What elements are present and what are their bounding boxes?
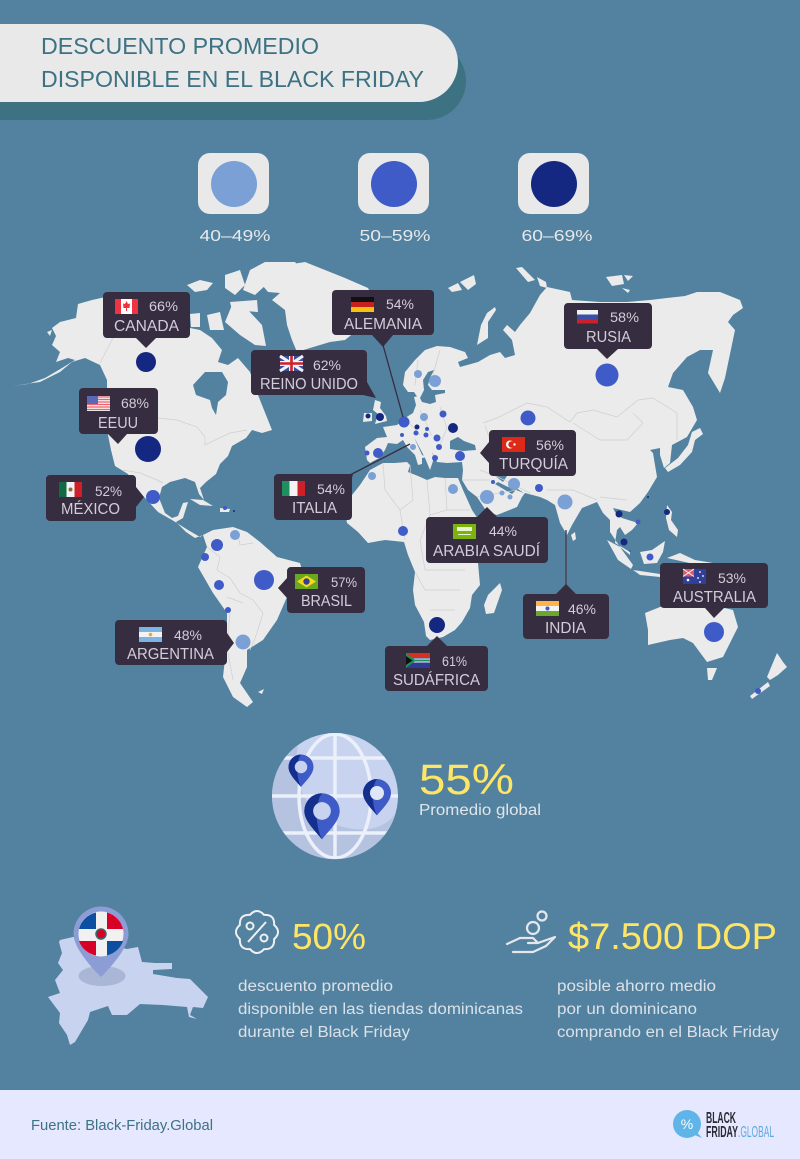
callout: India with leader line: INDIA — [545, 620, 587, 637]
callout: EEUU: 68% — [121, 395, 149, 411]
footer band — [0, 1090, 800, 1159]
icon: hand with coins — [507, 912, 555, 952]
callout: Canadá — [103, 292, 190, 348]
stat: Dominican average discount: 50% — [292, 916, 366, 957]
callout: Alemania with leader line: 54% — [386, 296, 414, 312]
callout: Sudáfrica: SUDÁFRICA — [393, 672, 481, 689]
callout: EEUU — [79, 388, 158, 444]
stat: Dominican average discount: descuento promedio — [238, 978, 393, 995]
logo: Black Friday Global: FRIDAY — [706, 1124, 738, 1141]
stat: Dominican average discount: durante el Black Friday — [238, 1024, 410, 1041]
callout: Brasil — [278, 567, 365, 613]
callout: Australia: AUSTRALIA — [673, 589, 757, 606]
callout: Australia: 53% — [718, 570, 746, 586]
map country borders — [100, 338, 677, 680]
icon: percent badge — [236, 911, 278, 953]
callout: Brasil: BRASIL — [301, 593, 352, 610]
callout: México — [46, 475, 144, 521]
map data bubbles — [135, 352, 761, 694]
stat: Dominican average discount: disponible en las tiendas dominicanas — [238, 1001, 523, 1018]
logo: Black Friday Global: BLACK — [706, 1110, 736, 1127]
legend: 40–49% — [200, 228, 270, 245]
callout: Reino Unido: 62% — [313, 357, 341, 373]
callout: Argentina: ARGENTINA — [127, 646, 215, 663]
stat: global average — [419, 756, 541, 819]
callout: Alemania with leader line — [332, 290, 434, 417]
callout: Sudáfrica: 61% — [442, 653, 467, 669]
callout: Reino Unido: REINO UNIDO — [260, 376, 358, 393]
callout: Rusia: 58% — [610, 309, 639, 325]
stat: possible saving: por un dominicano — [557, 1001, 697, 1018]
callout: Arabia Saudí — [426, 507, 548, 563]
world map landmasses — [12, 262, 787, 707]
callout: Rusia — [564, 303, 652, 359]
stat: global average: Promedio global — [419, 802, 541, 819]
stat: possible saving: $7.500 DOP — [568, 916, 777, 957]
callout: Turquía: TURQUÍA — [499, 456, 569, 473]
callout: Sudáfrica — [385, 636, 488, 691]
icon: globe with pins — [270, 733, 400, 859]
footer band: Fuente: Black-Friday.Global — [31, 1118, 213, 1134]
map inland seas — [193, 370, 524, 494]
callout: Italia with leader line — [274, 444, 410, 520]
stat: Dominican average discount — [238, 916, 523, 1041]
callout: México: 52% — [95, 483, 122, 499]
callout: Australia — [660, 563, 768, 618]
logo: Black Friday Global: % — [681, 1116, 693, 1132]
legend: 60–69% — [522, 228, 592, 245]
callout: Brasil: 57% — [331, 574, 357, 590]
callout: México: MÉXICO — [61, 501, 120, 518]
callout: Italia with leader line: 54% — [317, 481, 345, 497]
callout: Rusia: RUSIA — [586, 329, 632, 346]
callout: Arabia Saudí: 44% — [489, 523, 517, 539]
legend — [198, 153, 592, 245]
stat: possible saving — [557, 916, 779, 1041]
title banner: DISPONIBLE EN EL BLACK FRIDAY — [41, 66, 424, 92]
icon: Dominican Republic map with flag pin — [48, 906, 208, 1045]
callout: India with leader line — [523, 530, 609, 639]
callout: Canadá: 66% — [149, 298, 178, 314]
title banner — [0, 24, 466, 120]
callout: Turquía: 56% — [536, 437, 564, 453]
callout: EEUU: EEUU — [98, 415, 138, 432]
logo: Black Friday Global — [673, 1110, 774, 1141]
callout: Italia with leader line: ITALIA — [292, 500, 338, 517]
stat: possible saving: comprando en el Black Friday — [557, 1024, 779, 1041]
callout: Reino Unido — [251, 350, 376, 398]
callout: Argentina: 48% — [174, 627, 202, 643]
callout: Argentina — [115, 620, 234, 665]
callout: India with leader line: 46% — [568, 601, 596, 617]
legend: 50–59% — [360, 228, 430, 245]
stat: possible saving: posible ahorro medio — [557, 978, 716, 995]
callout: Canadá: CANADA — [114, 318, 180, 335]
stat: global average: 55% — [419, 756, 514, 804]
callout: Arabia Saudí: ARABIA SAUDÍ — [433, 543, 541, 560]
callout: Turquía — [480, 430, 576, 476]
callout: Alemania with leader line: ALEMANIA — [344, 316, 423, 333]
title banner: DESCUENTO PROMEDIO — [41, 33, 319, 59]
